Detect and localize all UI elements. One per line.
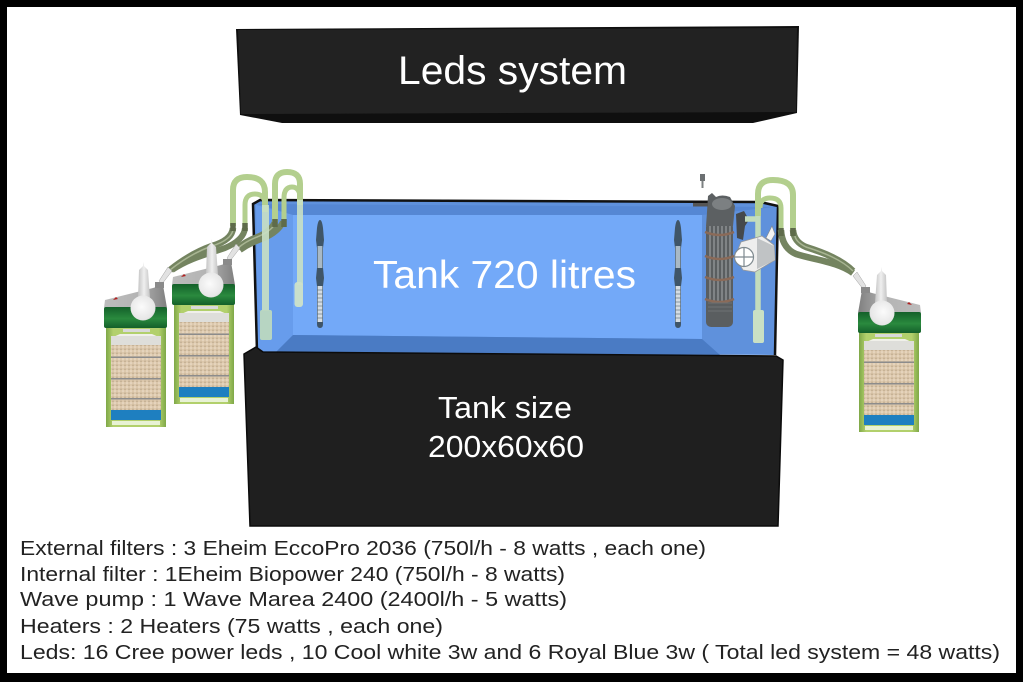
heater left xyxy=(316,220,324,328)
right hoses xyxy=(781,230,853,273)
tank capacity label: Tank 720 litres xyxy=(373,254,636,297)
heater right xyxy=(674,220,682,328)
tank back panel xyxy=(293,215,702,339)
external filter pipes left xyxy=(233,172,300,231)
heaters spec: Heaters : 2 Heaters (75 watts , each one) xyxy=(20,615,443,638)
heading: Leds system: Leds system xyxy=(398,49,627,93)
tank outline xyxy=(253,200,778,355)
tank top band xyxy=(258,204,774,215)
wave pump xyxy=(734,226,775,272)
tank floor xyxy=(276,335,720,355)
external filter 3 xyxy=(858,267,921,432)
external filter hoses left xyxy=(170,222,283,270)
stand dimensions: 200x60x60 xyxy=(428,429,584,464)
right intake pipes xyxy=(745,180,793,343)
external filter 1 xyxy=(104,262,167,427)
tank left side xyxy=(256,205,293,352)
leds spec: Leds: 16 Cree power leds , 10 Cool white 3w and 6 Royal Blue 3w ( Total led system = 48 watts) xyxy=(20,641,1000,664)
stand label: Tank size xyxy=(438,390,572,425)
LED system hood xyxy=(236,26,799,123)
cabinet stand xyxy=(244,347,783,526)
wave pump spec: Wave pump : 1 Wave Marea 2400 (2400l/h - 5 watts) xyxy=(20,588,567,611)
internal filter spec: Internal filter : 1Eheim Biopower 240 (750l/h - 8 watts) xyxy=(20,563,565,586)
specifications list xyxy=(20,537,1000,664)
external filter 2 xyxy=(172,239,235,404)
internal filter xyxy=(693,174,749,327)
aquarium tank xyxy=(253,199,778,355)
external filters spec: External filters : 3 Eheim EccoPro 2036 (750l/h - 8 watts , each one) xyxy=(20,537,706,560)
hose fittings xyxy=(159,244,866,289)
intake pipes and strainers left xyxy=(260,200,303,340)
